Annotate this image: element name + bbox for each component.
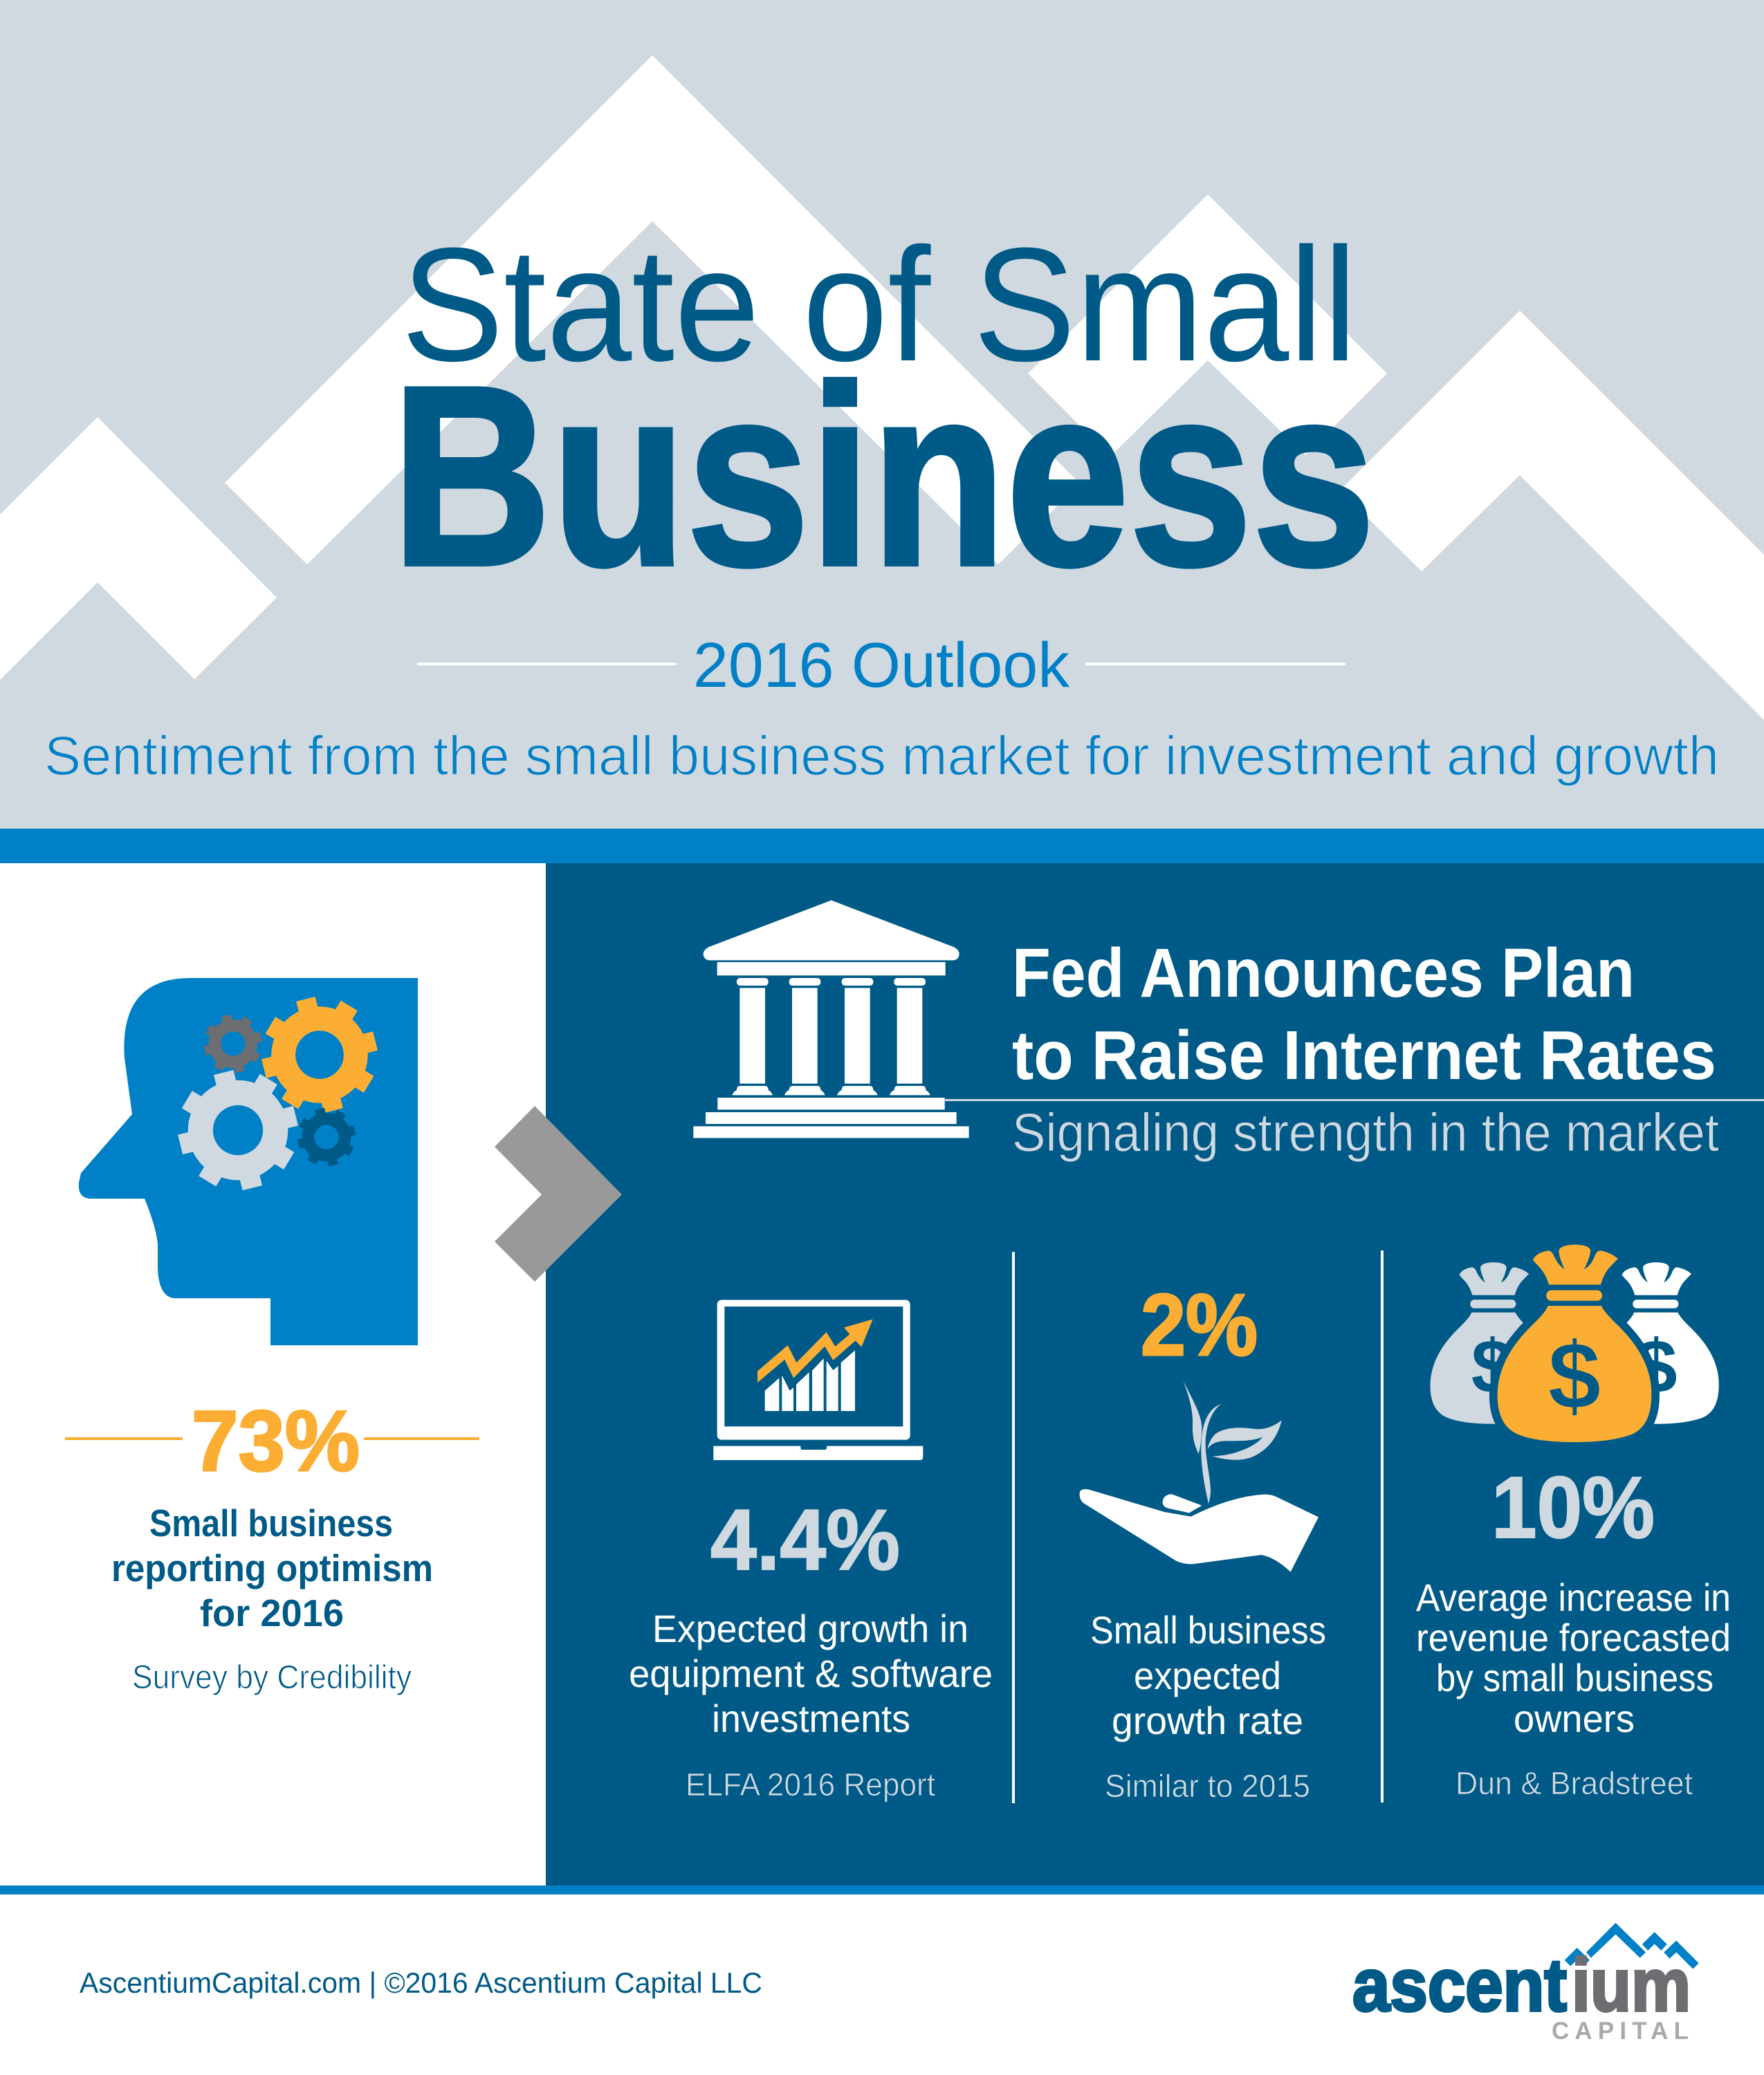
source: Dun & Bradstreet: Dun & Bradstreet	[1455, 1765, 1693, 1801]
icon: head with gears	[79, 978, 418, 1345]
growth description	[1090, 1608, 1326, 1742]
logo: Ascentium Capital: CAPITAL	[1552, 2018, 1689, 2045]
revenue description: revenue forecasted	[1416, 1616, 1731, 1659]
icon: laptop with chart	[713, 1300, 923, 1460]
header background	[0, 0, 1764, 829]
logo: Ascentium Capital: ium	[1572, 1943, 1691, 2027]
source: ELFA: ELFA 2016 Report	[686, 1767, 935, 1802]
headline	[1012, 934, 1716, 1094]
icon: money bags: $	[1635, 1324, 1678, 1409]
subtitle: 2016 Outlook: 2016 Outlook	[693, 630, 1070, 701]
tagline: Sentiment from the small business market for investment and growth	[44, 725, 1719, 786]
stat: 2%: 2%	[1141, 1276, 1258, 1374]
optimism description: Small business	[149, 1502, 393, 1544]
column: revenue increase	[1416, 1244, 1731, 1801]
revenue description	[1416, 1576, 1731, 1740]
sub-headline: Signaling strength in the market	[1012, 1102, 1719, 1163]
stat: 10%: 10%	[1491, 1459, 1655, 1556]
rule under headline	[945, 1099, 1764, 1101]
headline: to Raise Internet Rates	[1012, 1017, 1716, 1094]
equipment description: investments	[712, 1697, 910, 1740]
stat: 4.4%: 4.4%	[710, 1493, 900, 1588]
title: Business: Business	[392, 333, 1375, 619]
title: State of Small: State of Small	[401, 214, 1357, 395]
icon: money bags	[1430, 1244, 1719, 1442]
equipment description: Expected growth in	[652, 1607, 968, 1650]
optimism description	[111, 1502, 433, 1634]
stat: 73%: 73%	[192, 1394, 360, 1489]
equipment description	[629, 1607, 993, 1740]
bottom blue band	[0, 1885, 1764, 1894]
optimism description: reporting optimism	[111, 1547, 433, 1589]
mountain graphic	[0, 55, 1764, 720]
blue divider band	[0, 829, 1764, 863]
panel: optimism	[0, 863, 546, 1885]
panel background	[546, 863, 1764, 1885]
growth description: Small business	[1090, 1608, 1326, 1652]
panel: outlook figures	[546, 863, 1764, 1885]
column: expected growth	[1080, 1276, 1326, 1804]
source: similar to 2015: Similar to 2015	[1105, 1768, 1310, 1804]
growth description: expected	[1134, 1654, 1281, 1697]
optimism description: for 2016	[200, 1592, 344, 1634]
icon: money bags: $	[1548, 1323, 1601, 1430]
column: equipment growth	[629, 1300, 993, 1802]
icon: money bags: $	[1471, 1324, 1514, 1409]
footer text: AscentiumCapital.com | ©2016 Ascentium Capital LLC	[80, 1966, 762, 1999]
logo: Ascentium Capital: ascent	[1352, 1943, 1567, 2027]
revenue description: Average increase in	[1416, 1576, 1731, 1619]
column divider 2	[1381, 1251, 1384, 1802]
icon: hand with seedling	[1080, 1381, 1319, 1572]
growth description: growth rate	[1112, 1699, 1303, 1742]
headline: Fed Announces Plan	[1012, 934, 1635, 1012]
revenue description: by small business	[1436, 1656, 1714, 1699]
icon: bank building	[693, 901, 969, 1138]
arrow: chevron	[495, 1106, 622, 1282]
equipment description: equipment & software	[629, 1652, 993, 1695]
panel: header	[0, 0, 1764, 829]
revenue description: owners	[1514, 1697, 1635, 1740]
source: Credibility: Survey by Credibility	[132, 1659, 412, 1696]
panel background	[0, 863, 546, 1885]
logo: Ascentium Capital	[1352, 1923, 1699, 2045]
column divider 1	[1012, 1252, 1015, 1803]
